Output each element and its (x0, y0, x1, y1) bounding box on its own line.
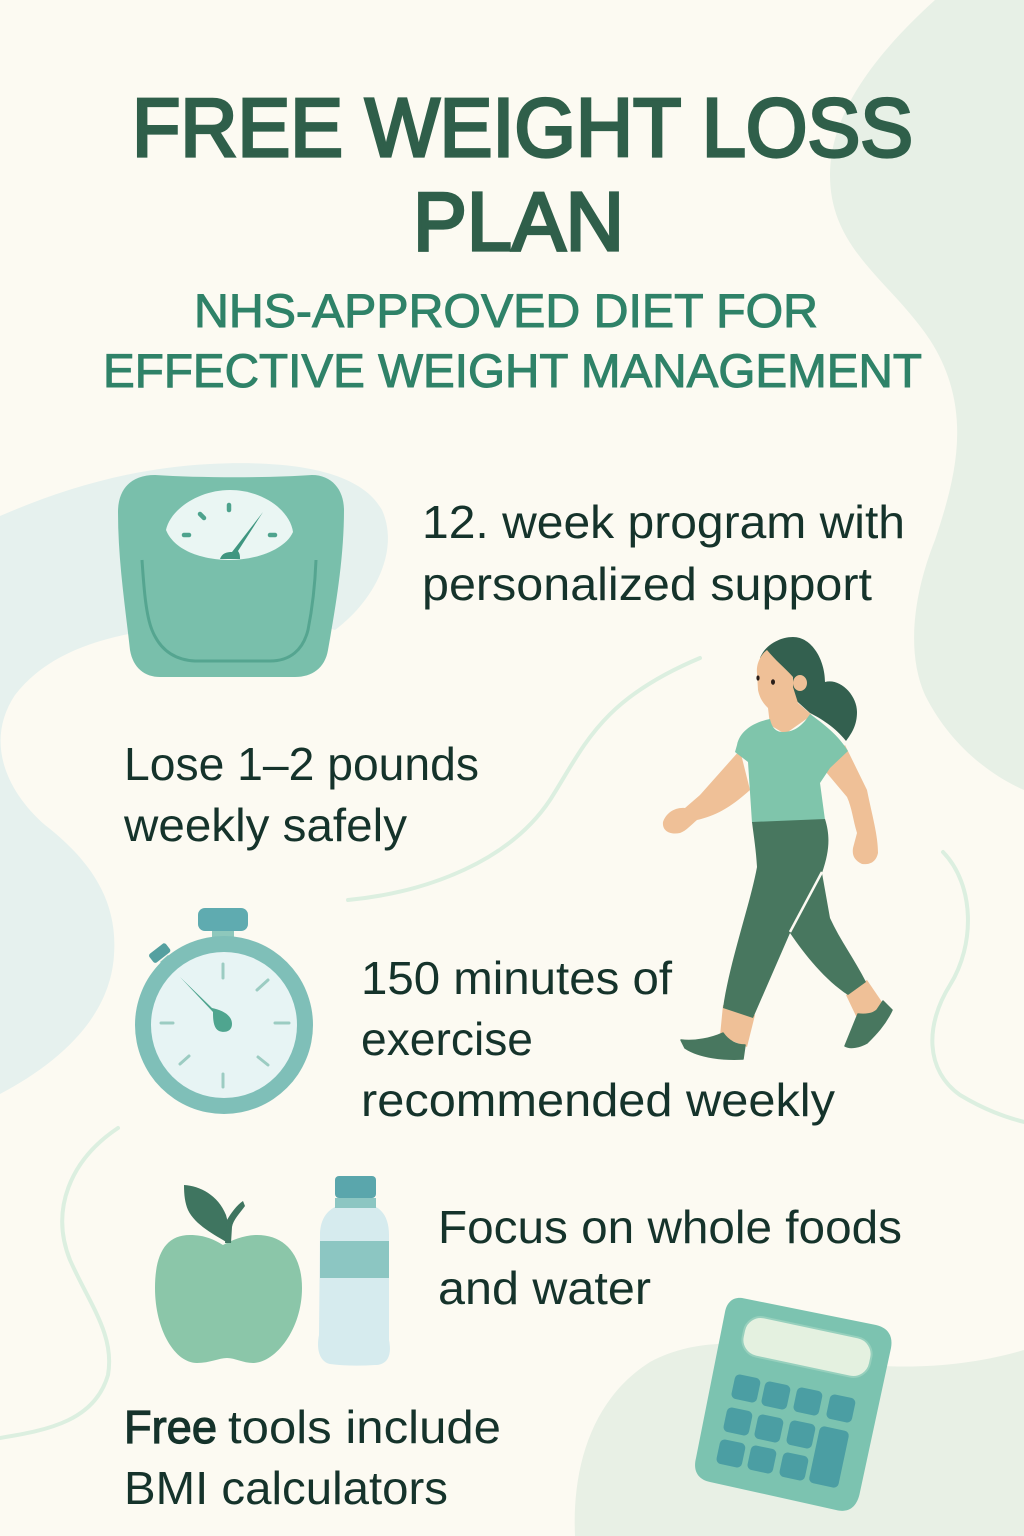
text: minutes of exercise: exercise (361, 1013, 533, 1065)
icon: water bottle (318, 1176, 390, 1366)
text: 12 week program (422, 496, 905, 610)
title: FREE WEIGHT LOSS (132, 81, 913, 174)
text: minutes of exercise: 150 minutes of (361, 952, 672, 1004)
title: PLAN (413, 175, 624, 268)
text: free tools: Free (124, 1401, 217, 1453)
text: free tools: tools include (228, 1401, 501, 1453)
text: lose pounds: Lose 1–2 pounds (124, 738, 479, 790)
text: whole foods: Focus on whole foods (438, 1201, 902, 1253)
subtitle: NHS-APPROVED DIET FOR (194, 284, 818, 337)
text: free tools (124, 1401, 501, 1514)
text: whole foods: and water (438, 1262, 651, 1314)
icon: calculator (695, 1298, 891, 1511)
title (132, 81, 913, 268)
text: 12 week program: personalized support (422, 558, 872, 610)
subtitle: EFFECTIVE WEIGHT MANAGEMENT (103, 344, 922, 397)
illustration: walking woman (663, 637, 892, 1059)
text: free tools: BMI calculators (124, 1462, 448, 1514)
text: 12 week program: 12. week program with (422, 496, 905, 548)
icon: apple (155, 1185, 302, 1363)
text: lose pounds (123, 738, 479, 851)
icon: bathroom scale (118, 475, 344, 677)
decorative curved lines (0, 658, 1024, 1438)
text: lose pounds: weekly safely (123, 799, 407, 851)
text: whole foods (438, 1201, 902, 1314)
text: minutes of exercise (361, 952, 835, 1126)
subtitle (103, 284, 922, 397)
text: minutes of exercise: recommended weekly (361, 1074, 835, 1126)
icon: stopwatch (135, 908, 313, 1114)
